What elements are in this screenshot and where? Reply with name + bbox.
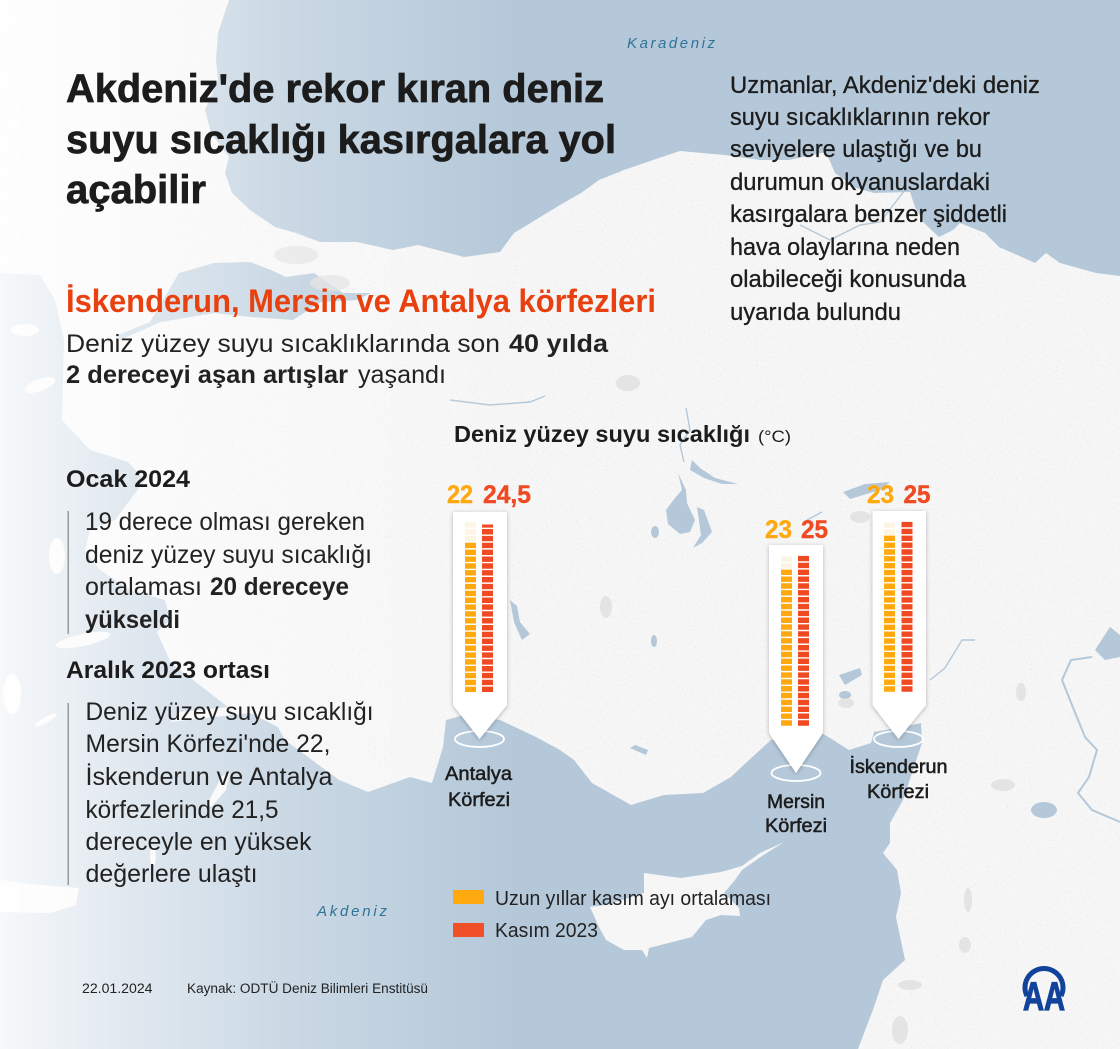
intro paragraph: uyarıda bulundu [730,299,901,326]
title: suyu sıcaklığı kasırgalara yol [66,118,616,162]
place name: Körfezi [448,790,510,811]
date: 22.01.2024 [82,981,153,996]
intro paragraph: seviyelere ulaştığı ve bu [730,136,982,163]
values: 24,5 [483,481,531,509]
block: Aralık 2023 ortası: körfezlerinde 21,5 [86,796,278,824]
place name: Mersin [767,792,825,813]
legend [453,888,771,942]
block: Ocak 2024: yükseldi [85,606,180,634]
values: 22 [447,481,473,509]
chart pin: Mersin Körfezi [765,516,828,837]
block: Aralık 2023 ortası: İskenderun ve Antalya [86,762,333,791]
Aegean and Mediterranean [0,273,922,1049]
values: 23 [867,481,894,509]
icon: AA logo [1023,969,1065,1019]
heading: Ocak 2024: Ocak 2024 [66,466,191,493]
lakes and rivers [510,460,1120,818]
block: Ocak 2024: deniz yüzey suyu sıcaklığı [85,541,372,569]
place name: Körfezi [867,782,929,803]
values [765,516,828,544]
title: Akdeniz'de rekor kıran deniz [66,67,604,111]
block: Aralık 2023 ortası: değerlere ulaştı [86,860,258,888]
sea label: Karadeniz: Karadeniz [627,35,716,52]
intro paragraph: durumun okyanuslardaki [730,169,990,196]
subheading description: 40 yılda [509,330,609,358]
values [447,481,531,509]
legend: Uzun yıllar kasım ayı ortalaması [495,888,771,910]
place name [850,757,948,803]
chart title: (°C) [758,427,791,446]
place name: İskenderun [850,757,948,778]
title: açabilir [66,168,206,212]
Sea of Marmara [118,262,371,340]
intro paragraph [730,72,1040,326]
subheading description: 2 dereceyi aşan artışlar [66,361,348,389]
intro paragraph: suyu sıcaklıklarının rekor [730,104,990,131]
place name [445,764,512,811]
subheading description: yaşandı [358,361,446,389]
intro paragraph: Uzmanlar, Akdeniz'deki deniz [730,72,1040,99]
heading: Aralık 2023 ortası: Aralık 2023 ortası [66,657,270,684]
chart title: Deniz yüzey suyu sıcaklığı [454,421,750,447]
sea label: Akdeniz: Akdeniz [316,903,388,920]
intro paragraph: kasırgalara benzer şiddetli [730,201,1007,228]
block: Ocak 2024: 20 dereceye [210,573,349,601]
values: 25 [904,481,931,509]
title [66,67,616,212]
chart pin: Antalya Körfezi [445,481,531,811]
source: Kaynak: ODTÜ Deniz Bilimleri Enstitüsü [187,981,428,996]
place name: Antalya [445,764,512,785]
chart pin: İskenderun Körfezi [850,481,948,803]
values [867,481,931,509]
subheading description: Deniz yüzey suyu sıcaklıklarında son [66,330,500,358]
place name: Körfezi [765,816,827,837]
legend: Kasım 2023 [495,920,598,942]
block: Aralık 2023 ortası [66,657,374,888]
subheading: İskenderun, Mersin ve Antalya körfezleri [66,283,656,319]
islands [0,321,784,958]
place name [765,792,827,837]
left fade overlay [0,0,520,1049]
block: Aralık 2023 ortası: Mersin Körfezi'nde 22, [86,730,330,758]
block: Aralık 2023 ortası: dereceyle en yüksek [86,828,312,856]
subheading description [66,330,609,389]
block: Ocak 2024 [66,466,372,634]
block: Ocak 2024: ortalaması [85,573,202,601]
block: Aralık 2023 ortası: Deniz yüzey suyu sıcaklığı [86,698,374,726]
intro paragraph: olabileceği konusunda [730,266,967,293]
icon: AA logo: AA [1023,975,1065,1019]
Black Sea [205,0,1120,276]
values: 25 [801,516,828,544]
block: Ocak 2024: 19 derece olması gereken [85,508,365,536]
values: 23 [765,516,792,544]
urban areas [274,246,1026,1044]
intro paragraph: hava olaylarına neden [730,234,960,261]
